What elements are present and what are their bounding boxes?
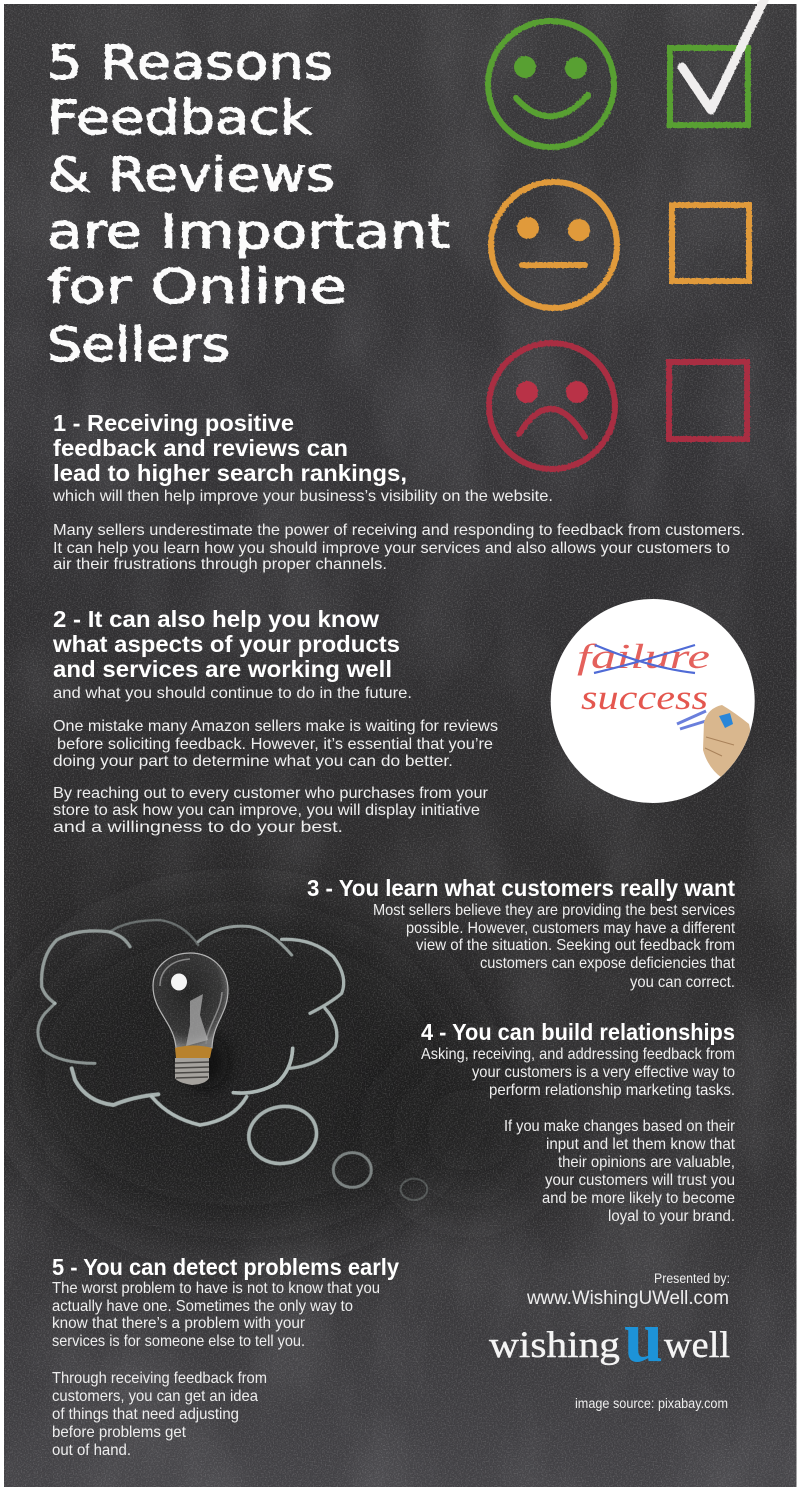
icon: orange empty box (672, 205, 749, 281)
logo: wishingUwell (489, 1296, 730, 1378)
icon: green checked box (670, 0, 764, 125)
icon: red sad face (489, 343, 615, 469)
icon: red empty box (669, 362, 747, 439)
section 2 text: store to ask how you can improve, you will display initiative (53, 802, 480, 819)
section 4 text: loyal to your brand. (608, 1208, 735, 1225)
section 5 text: know that there’s a problem with your (52, 1315, 305, 1332)
section 4 text: Asking, receiving, and addressing feedback from (421, 1046, 735, 1063)
section 5 text: actually have one. Sometimes the only way to (52, 1298, 353, 1315)
section 4 text: perform relationship marketing tasks. (489, 1082, 735, 1099)
image: failure and success whiteboard circle: success (581, 678, 708, 717)
section 4 text: and be more likely to become (542, 1190, 735, 1207)
section 1 text: It can help you learn how you should improve your services and also allows your customers to (53, 540, 730, 557)
section 2 text: and services are working well (53, 656, 392, 682)
section 5 text: of things that need adjusting (52, 1406, 239, 1423)
section 2 text (52, 606, 498, 836)
section 3 text: Most sellers believe they are providing the best services (373, 902, 735, 919)
logo: wishingUwell: u (624, 1296, 663, 1378)
section 5 text: 5 - You can detect problems early (52, 1254, 399, 1280)
section 3 text: possible. However, customers may have a different (406, 920, 736, 937)
title: Feedback (47, 91, 313, 146)
image: failure and success whiteboard circle: failure (577, 637, 710, 676)
title: Sellers (47, 318, 230, 373)
section 5 text (52, 1254, 399, 1459)
section 4 text: 4 - You can build relationships (421, 1019, 735, 1045)
section 4 text: your customers is a very effective way to (472, 1064, 735, 1081)
illustration: light bulb (153, 953, 228, 1088)
section 4 text: If you make changes based on their (504, 1118, 735, 1135)
section 2 text: doing your part to determine what you can do better. (53, 753, 453, 770)
image source credit: image source: pixabay.com (575, 1396, 728, 1411)
section 4 text: input and let them know that (546, 1136, 736, 1153)
title: & Reviews (47, 148, 335, 203)
section 4 text (421, 1019, 736, 1225)
section 1 text: Many sellers underestimate the power of receiving and responding to feedback from customers. (53, 522, 745, 539)
section 2 text: what aspects of your products (52, 631, 400, 657)
section 3 text: customers can expose deficiencies that (480, 955, 736, 972)
icon: orange neutral face (491, 182, 617, 308)
section 1 text: feedback and reviews can (53, 435, 348, 461)
section 2 text: By reaching out to every customer who purchases from your (53, 785, 488, 802)
section 1 text: 1 - Receiving positive (53, 410, 294, 436)
section 5 text: services is for someone else to tell you. (52, 1333, 305, 1350)
section 5 text: The worst problem to have is not to know that you (52, 1280, 380, 1297)
section 3 text (307, 875, 736, 991)
section 5 text: out of hand. (52, 1442, 131, 1459)
section 5 text: Through receiving feedback from (52, 1370, 267, 1387)
section 5 text: before problems get (52, 1424, 187, 1441)
illustration: chalk thought cloud (38, 920, 427, 1200)
section 1 text: air their frustrations through proper channels. (53, 556, 387, 573)
logo: wishingUwell: well (664, 1325, 730, 1366)
title: 5 Reasons (47, 36, 333, 91)
section 2 text: before soliciting feedback. However, it’s essential that you’re (57, 736, 493, 753)
section 2 text: and a willingness to do your best. (53, 819, 343, 836)
section 4 text: your customers will trust you (545, 1172, 735, 1189)
image: failure and success whiteboard circle (551, 599, 755, 803)
title: are Important (47, 205, 450, 260)
section 4 text: their opinions are valuable, (558, 1154, 735, 1171)
section 3 text: view of the situation. Seeking out feedback from (416, 937, 735, 954)
title: for Online (47, 260, 347, 315)
section 2 text: One mistake many Amazon sellers make is waiting for reviews (53, 718, 498, 735)
section 2 text: 2 - It can also help you know (53, 606, 379, 632)
section 3 text: 3 - You learn what customers really want (307, 875, 735, 901)
logo: wishingUwell: wishing (489, 1325, 620, 1366)
section 1 text: which will then help improve your business’s visibility on the website. (52, 488, 553, 505)
title (47, 36, 450, 373)
section 1 text: lead to higher search rankings, (53, 460, 407, 486)
icon: green happy face (488, 21, 614, 147)
presented by credit: www.WishingUWell.com (526, 1288, 729, 1309)
section 1 text (52, 410, 745, 573)
section 5 text: customers, you can get an idea (52, 1388, 258, 1405)
presented by credit: Presented by: (654, 1271, 730, 1286)
presented by credit (526, 1271, 730, 1309)
section 3 text: you can correct. (630, 974, 735, 991)
section 2 text: and what you should continue to do in the future. (53, 685, 412, 702)
